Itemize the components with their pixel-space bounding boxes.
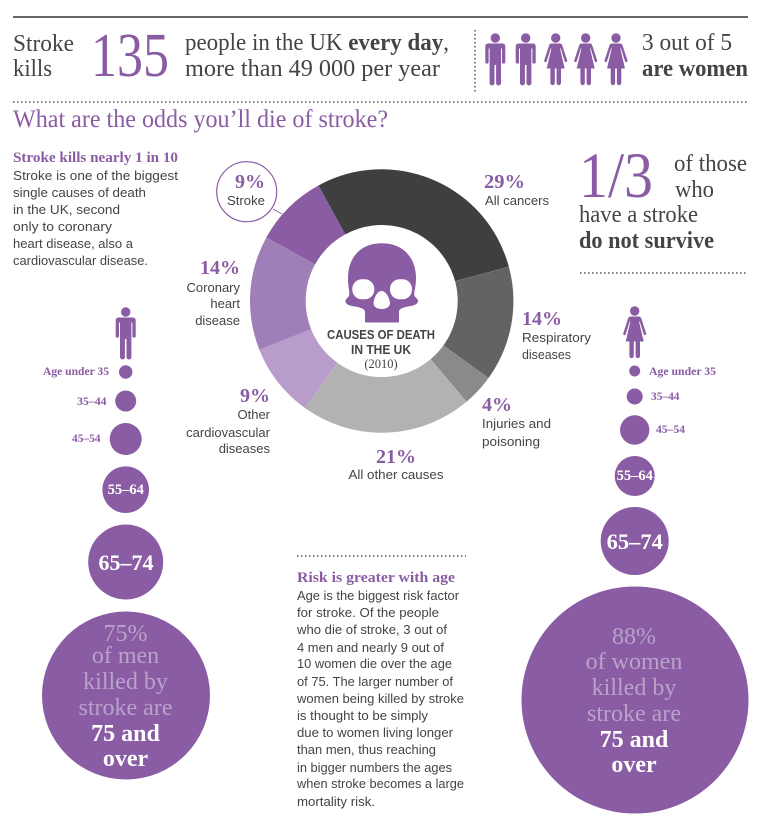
- text block: risk is greater with age: than men, thus reaching: [297, 742, 436, 757]
- donut centre title: (2010): [364, 357, 398, 371]
- label: stroke kills: [13, 31, 74, 82]
- label: other cardiovascular: Other: [237, 407, 271, 422]
- label: all cancers: [484, 171, 550, 208]
- bubble: 65-74: 65–74: [607, 529, 663, 554]
- donut chart: causes of death: [235, 155, 528, 447]
- bubble: 35-44: [77, 390, 136, 412]
- text block: risk is greater with age: Risk is greater with age: [297, 570, 455, 586]
- bubble: 35-44: 35–44: [77, 394, 106, 408]
- label: other cardiovascular: [186, 385, 271, 456]
- text: 3 out of 5 are women: 3 out of 5: [642, 30, 732, 56]
- label: other cardiovascular: 9%: [240, 385, 270, 407]
- icon: woman: [623, 306, 646, 358]
- text block: risk is greater with age: is thought to be simply: [297, 708, 428, 723]
- text block: stroke kills nearly 1 in 10: only to coronary: [13, 219, 113, 234]
- text block: risk is greater with age: women being killed by stroke: [296, 691, 464, 706]
- text block: stroke kills nearly 1 in 10: cardiovascular disease.: [13, 253, 148, 268]
- callout: stroke 9%: Stroke: [227, 193, 265, 208]
- bubble: under 35: Age under 35: [649, 364, 716, 378]
- bubble: 75 and over men: 75%: [104, 621, 148, 647]
- donut centre title: [327, 328, 435, 371]
- text block: risk is greater with age: 10 women die over the age: [297, 656, 452, 671]
- bubble: 75 and over men: stroke are: [79, 695, 172, 721]
- text block: risk is greater with age: due to women living longer: [297, 725, 454, 740]
- bubble: 55-64: 55–64: [108, 482, 144, 498]
- icon: skull: [345, 243, 418, 322]
- bubble: 75 and over women: 75 and: [600, 727, 669, 753]
- text block: stroke kills nearly 1 in 10: Stroke kills nearly 1 in 10: [13, 150, 178, 166]
- bubble: 75 and over men: of men: [92, 643, 159, 669]
- bubble: 75 and over women: [522, 586, 748, 814]
- bubble: 75 and over men: killed by: [83, 669, 168, 695]
- stat: one third do not survive: who: [675, 177, 714, 203]
- label: coronary heart disease: heart: [210, 296, 240, 311]
- men age bubbles: [42, 307, 210, 780]
- text block: risk is greater with age: [296, 570, 464, 809]
- icon: man: [116, 307, 136, 359]
- callout: stroke 9%: [217, 162, 282, 222]
- donut centre title: IN THE UK: [351, 343, 411, 357]
- label: injuries and poisoning: 4%: [482, 394, 512, 416]
- bubble: under 35: Age under 35: [43, 364, 109, 378]
- text: 3 out of 5 are women: [642, 30, 748, 82]
- stat: one third do not survive: 1/3: [579, 140, 653, 212]
- text block: stroke kills nearly 1 in 10: heart disease, also a: [13, 236, 134, 251]
- bubble: 65-74: [88, 524, 163, 600]
- text block: stroke kills nearly 1 in 10: in the UK, second: [13, 202, 120, 217]
- label: respiratory diseases: Respiratory: [522, 330, 592, 345]
- callout: stroke 9%: 9%: [235, 171, 265, 193]
- label: respiratory diseases: diseases: [522, 347, 571, 362]
- bubble: 75 and over women: over: [611, 752, 657, 778]
- text block: risk is greater with age: of 75. The larger number of: [297, 674, 453, 689]
- label: respiratory diseases: 14%: [522, 308, 562, 330]
- bubble: 75 and over women: 88%: [612, 624, 656, 650]
- label: all cancers: 29%: [484, 171, 525, 193]
- text block: risk is greater with age: mortality risk.: [297, 794, 375, 809]
- bubble: 75 and over men: 75 and: [91, 721, 160, 747]
- text block: risk is greater with age: when stroke becomes a large: [296, 776, 464, 791]
- stat: one third do not survive: have a stroke: [579, 202, 698, 228]
- text block: risk is greater with age: who die of stroke, 3 out of: [296, 622, 447, 637]
- bubble: 75 and over women: of women: [586, 649, 682, 675]
- text: people per day: [185, 30, 449, 82]
- text block: risk is greater with age: Age is the biggest risk factor: [297, 588, 460, 603]
- label: other cardiovascular: diseases: [219, 441, 270, 456]
- text block: stroke kills nearly 1 in 10: [13, 150, 178, 268]
- stat: one third do not survive: do not survive: [579, 228, 714, 254]
- bubble: 35-44: 35–44: [651, 389, 680, 403]
- label: coronary heart disease: Coronary: [187, 280, 240, 295]
- icons: 3 of 5 are women: [485, 33, 628, 85]
- label: injuries and poisoning: Injuries and: [482, 416, 551, 431]
- text block: stroke kills nearly 1 in 10: single causes of death: [13, 185, 146, 200]
- label: stroke kills: Stroke: [13, 31, 74, 57]
- label: injuries and poisoning: [482, 394, 551, 449]
- label: all other causes: All other causes: [348, 467, 444, 482]
- text: people per day: more than 49 000 per year: [185, 56, 440, 82]
- label: all cancers: All cancers: [485, 193, 550, 208]
- heading: What are the odds you’ll die of stroke?: [13, 106, 388, 133]
- bubble: 55-64: 55–64: [617, 468, 653, 484]
- bubble: 75 and over men: [42, 612, 210, 780]
- label: coronary heart disease: 14%: [200, 257, 240, 279]
- label: stroke kills: kills: [13, 56, 52, 82]
- women age bubbles: [522, 306, 748, 814]
- text: 3 out of 5 are women: are women: [642, 56, 748, 82]
- text block: risk is greater with age: in bigger numbers the ages: [297, 760, 452, 775]
- label: other cardiovascular: cardiovascular: [186, 425, 271, 440]
- bubble: 45-54: [620, 415, 685, 445]
- text: people per day: people in the UK every day,: [185, 30, 449, 56]
- bubble: 45-54: 45–54: [72, 431, 100, 445]
- label: respiratory diseases: [522, 308, 592, 362]
- bubble: 35-44: [627, 388, 680, 404]
- text block: risk is greater with age: 4 men and nearly 9 out of: [297, 640, 444, 655]
- bubble: 45-54: 45–54: [656, 422, 685, 436]
- bubble: 45-54: [72, 423, 142, 455]
- stat: one third do not survive: of those: [674, 151, 747, 177]
- bubble: 55-64: [102, 466, 149, 513]
- big number 135: 135: [91, 22, 169, 90]
- bubble: 65-74: 65–74: [98, 550, 154, 575]
- bubble: 75 and over women: stroke are: [587, 701, 681, 727]
- bubble: 55-64: [615, 456, 655, 496]
- label: all other causes: [348, 446, 444, 482]
- text block: risk is greater with age: for stroke. Of the people: [297, 605, 439, 620]
- bubble: 75 and over women: killed by: [592, 675, 676, 701]
- stat: stroke kills 135: [13, 22, 449, 90]
- bubble: 75 and over men: over: [103, 746, 148, 772]
- label: all other causes: 21%: [376, 446, 416, 468]
- bubble: 65-74: [601, 507, 669, 575]
- label: injuries and poisoning: poisoning: [482, 434, 540, 449]
- stat: one third do not survive: [579, 140, 747, 254]
- donut centre title: CAUSES OF DEATH: [327, 328, 435, 342]
- label: coronary heart disease: [187, 257, 240, 328]
- label: coronary heart disease: disease: [195, 313, 240, 328]
- text block: stroke kills nearly 1 in 10: Stroke is one of the biggest: [13, 168, 178, 183]
